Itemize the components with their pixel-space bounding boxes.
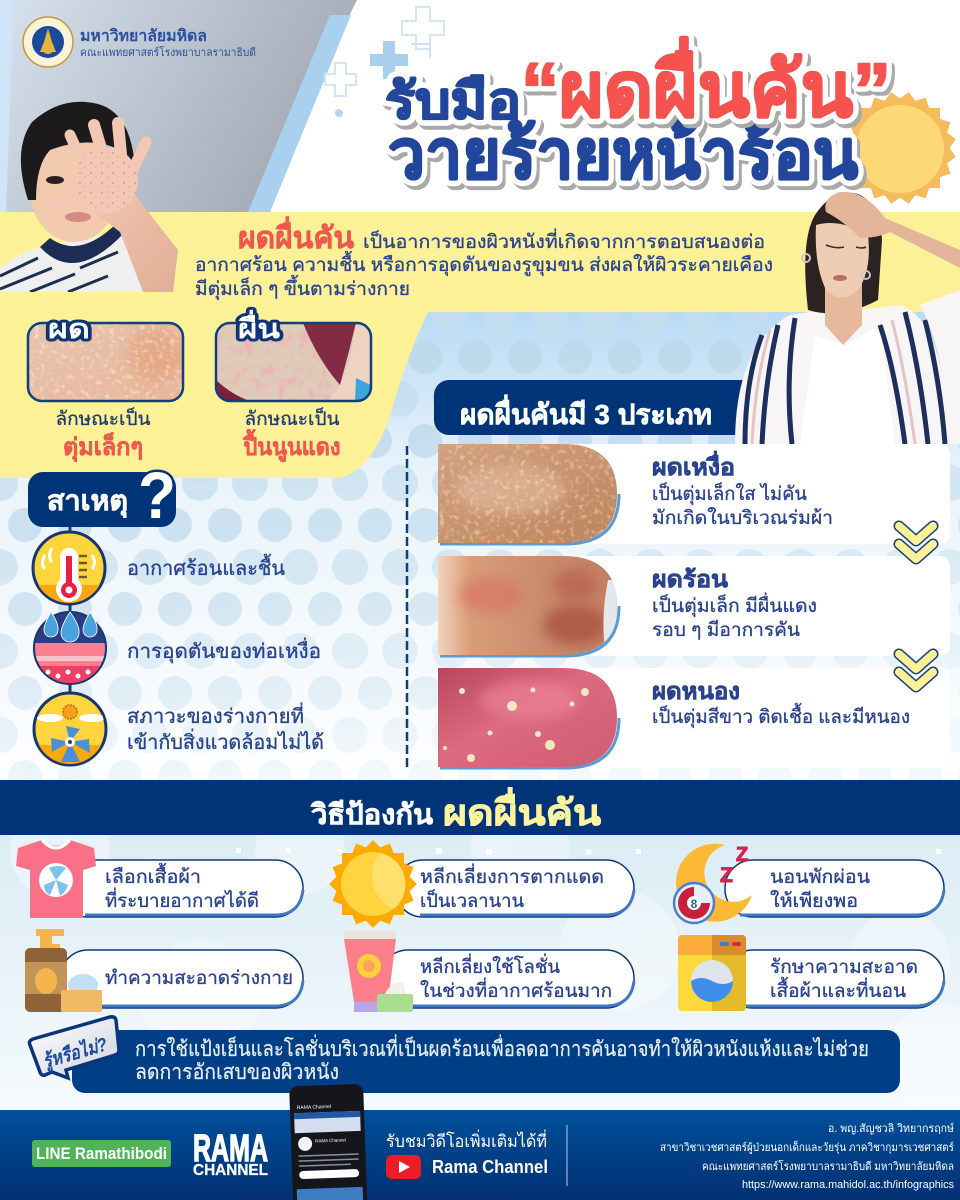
icon: moon and clock: 8 (691, 897, 698, 911)
heading: three types: ผดผื่นคันมี 3 ประเภท (460, 394, 712, 430)
panel: small bumps (ผด) (28, 314, 183, 463)
credits: อ. พญ.สัญชวลิ วิทยากรฤกษ์ (828, 1122, 954, 1135)
LINE button (32, 1140, 171, 1167)
prevention item: sleep (674, 844, 944, 923)
prevention item: avoid lotion: หลีกเลี่ยงใช้โลชั่น (420, 953, 560, 978)
prevention item: avoid lotion: ในช่วงที่อากาศร้อนมาก (420, 977, 612, 1002)
icon: washing machine (678, 935, 746, 1011)
icon: moon and clock: Z (736, 844, 748, 866)
title (385, 36, 894, 197)
text: ผดหนอง (652, 678, 740, 704)
speech bubble (29, 1017, 119, 1078)
heading: university name (80, 27, 256, 59)
caption: ลักษณะเป็น (56, 406, 151, 430)
panel: heat rash type 3 (438, 668, 950, 768)
callout: did you know: ลดการอักเสบของผิวหนัง (135, 1061, 339, 1084)
phone mockup: RAMA Channel (297, 1104, 331, 1111)
prevention item: laundry: เสื้อผ้าและที่นอน (770, 977, 906, 1002)
arm and hand (825, 192, 960, 268)
prevention item: avoid sun: หลีกเลี่ยงการตากแดด (420, 863, 604, 888)
icon: sun and fan (30, 693, 110, 770)
banner: prevention heading (0, 780, 960, 835)
prevention item: avoid sun (329, 840, 634, 928)
prevention item: avoid sun: เป็นเวลานาน (420, 888, 524, 912)
title: วายร้ายหน้าร้อน (391, 121, 861, 197)
panel: red raised rash (ผื่น) (216, 309, 371, 462)
neck and face (825, 280, 862, 345)
title: “ผดผื่นคัน” (521, 36, 891, 133)
callout: did you know: การใช้แป้งเย็นและโลชั่นบริเวณที่เป็นผดร้อนเพื่อลดอาการคันอาจทำให้ผิวหนังแห้งและไม่ช่วย (135, 1034, 869, 1061)
arrow: chevrons 1 (899, 526, 933, 559)
heading: causes: สาเหตุ (47, 485, 128, 518)
photo: rash on arm (216, 323, 371, 401)
icon: decorative plus signs (325, 7, 444, 117)
title: รับมือ (385, 73, 521, 129)
shirt (0, 232, 145, 292)
panel: heat rash type 2 (438, 556, 950, 656)
hand (52, 123, 146, 213)
banner: prevention heading: ผดผื่นคัน (443, 787, 601, 833)
panel: heat rash type 2: เป็นตุ่มเล็ก มีผื่นแดง (652, 592, 817, 618)
caption: ตุ่มเล็กๆ (63, 432, 143, 463)
title: “ผดผื่นคัน” (524, 40, 894, 137)
panel: yellow intro panel (0, 212, 960, 478)
RAMA CHANNEL logo: CHANNEL (193, 1162, 268, 1179)
banner: prevention heading: วิธีป้องกัน (310, 799, 433, 830)
text block: definition: อากาศร้อน ความชื้น หรือการอุดตันของรูขุมขน ส่งผลให้ผิวระคายเคือง (195, 251, 773, 277)
photo: bumps (28, 323, 183, 401)
caption (56, 406, 151, 463)
text block: causes list: สภาวะของร่างกายที่ (127, 702, 304, 728)
panel: heat rash type 1: มักเกิดในบริเวณร่มผ้า (652, 507, 833, 529)
text block: causes list: อากาศร้อนและชื้น (127, 554, 285, 580)
caption: ปื้นนูนแดง (242, 428, 340, 462)
icon: sun behind title (844, 92, 956, 204)
icon: video play button (386, 1155, 421, 1179)
speech bubble: รู้หรือไม่? (40, 1032, 110, 1074)
panel: prevention background (0, 800, 960, 1115)
text block: causes list: เข้ากับสิ่งแวดล้อมไม่ได้ (127, 728, 324, 754)
heading: three types (434, 380, 764, 435)
icon: thermometer (30, 532, 110, 610)
title: วายร้ายหน้าร้อน (388, 117, 858, 193)
LINE button: LINE Ramathibodi (36, 1144, 167, 1163)
prevention item: sleep: นอนพักผ่อน (770, 867, 870, 888)
heading: causes: ? (138, 458, 176, 532)
photo: red rash on back (438, 556, 618, 656)
arrow: chevrons 2 (899, 654, 933, 687)
prevention item: sleep: ให้เพียงพอ (770, 890, 858, 912)
panel: heat rash type 3: เป็นตุ่มสีขาว ติดเชื้อ และมีหนอง (652, 703, 910, 729)
title: รับมือ (388, 77, 524, 133)
photo: boy showing rash on hand (0, 102, 178, 292)
prevention item: laundry (678, 935, 944, 1011)
icon: moon and clock (674, 844, 752, 923)
panel: heat rash type 1: เป็นตุ่มเล็กใส ไม่คัน (652, 481, 807, 506)
text block: definition (195, 216, 773, 301)
caption (242, 406, 340, 462)
dashed divider (406, 446, 408, 770)
title: “ผดผื่นคัน” (521, 36, 891, 133)
footer (0, 1084, 960, 1200)
text: ผดเหงื่อ (652, 450, 735, 480)
heading: causes (28, 458, 176, 532)
text block: definition: มีตุ่มเล็ก ๆ ขึ้นตามร่างกาย (195, 275, 410, 301)
text block: definition: เป็นอาการของผิวหนังที่เกิดจากการตอบสนองต่อ (363, 228, 765, 253)
lower content background with dots (0, 312, 960, 782)
heading: university name: มหาวิทยาลัยมหิดล (80, 27, 207, 45)
icon connector line (68, 527, 72, 745)
prevention item: laundry: รักษาความสะอาด (770, 957, 918, 978)
RAMA CHANNEL logo: RAMA (193, 1128, 268, 1170)
prevention item: clothing: ที่ระบายอากาศได้ดี (105, 887, 259, 912)
phone mockup: RAMA Channel (315, 1137, 346, 1144)
heading: university name: คณะแพทยศาสตร์โรงพยาบาลรามาธิบดี (80, 45, 256, 59)
prevention item: body hygiene (25, 929, 303, 1012)
title: รับมือ (385, 73, 521, 129)
icon: blocked sweat duct (32, 612, 108, 688)
arm (99, 195, 178, 292)
icon: moon and clock: Z (720, 864, 733, 887)
channel name: Rama Channel (432, 1157, 548, 1177)
label: ผด: ผด (48, 314, 90, 344)
phone mockup (289, 1084, 368, 1200)
callout: did you know (29, 1017, 900, 1093)
logo: Mahidol University seal (23, 17, 73, 67)
photo backdrop: grey wall (0, 0, 357, 212)
icon: soap bottle (25, 929, 102, 1012)
hair (805, 192, 882, 313)
jacket and top (735, 305, 950, 444)
credits (660, 1122, 954, 1191)
text: ผดร้อน (652, 566, 728, 592)
label: ผื่น: ผื่น (238, 309, 281, 344)
prevention item: body hygiene: ทำความสะอาดร่างกาย (105, 968, 293, 989)
panel: heat rash type 1 (438, 444, 950, 544)
watch more text: รับชมวิดีโอเพิ่มเติมได้ที่ (386, 1129, 547, 1151)
text block: definition: ผดผื่นคัน (238, 216, 354, 255)
text block: causes list: การอุดตันของท่อเหงื่อ (127, 637, 321, 664)
head (30, 142, 108, 242)
title: วายร้ายหน้าร้อน (388, 117, 858, 193)
icon: lotion tube (344, 931, 413, 1012)
icon: shirt (16, 840, 96, 918)
photo: pustules (438, 668, 618, 768)
panel: heat rash type 2: รอบ ๆ มีอาการคัน (652, 619, 800, 641)
prevention item: clothing (16, 840, 303, 918)
prevention item: clothing: เลือกเสื้อผ้า (105, 863, 201, 888)
caption: ลักษณะเป็น (244, 406, 340, 430)
text block: causes list (127, 554, 324, 754)
photo: sweat rash (438, 444, 618, 544)
prevention item: avoid lotion (344, 931, 634, 1012)
icon: sun (329, 840, 417, 928)
credits: https://www.rama.mahidol.ac.th/infographics (742, 1179, 954, 1191)
photo: woman with hand on forehead (735, 192, 960, 444)
RAMA CHANNEL logo (193, 1128, 268, 1179)
